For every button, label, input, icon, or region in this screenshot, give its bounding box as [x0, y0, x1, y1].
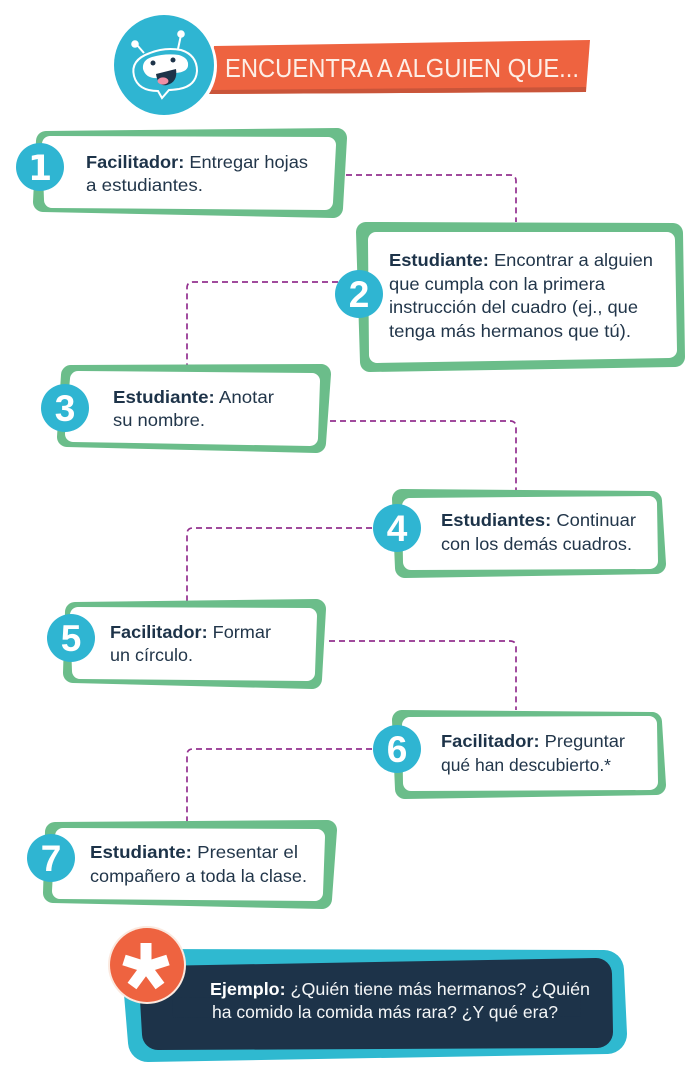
step 1 text: [86, 152, 308, 195]
step 7 text: Estudiante: Presentar el: [90, 842, 298, 862]
step 6 badge: 6: [387, 729, 407, 770]
icon: robot mascot: [111, 13, 217, 119]
step 6 badge: [373, 725, 421, 773]
step 4 text: con los demás cuadros.: [441, 534, 632, 554]
panel: step 7: [27, 830, 327, 899]
step 5 text: un círculo.: [110, 645, 193, 665]
step 2 badge: [335, 270, 383, 318]
step 7 badge: 7: [41, 838, 61, 879]
panel: step 3: [41, 374, 321, 443]
step 4 text: [441, 510, 636, 554]
step 1 badge: 1: [28, 149, 52, 189]
step 4 badge: [373, 504, 421, 552]
step 1 text: Facilitador: Entregar hojas: [86, 152, 308, 172]
title banner: [209, 40, 590, 94]
step 5 badge: [47, 614, 95, 662]
example text: ha comido la comida más rara? ¿Y qué era?: [212, 1002, 558, 1022]
example text: Ejemplo: ¿Quién tiene más hermanos? ¿Quién: [210, 979, 590, 999]
arrow: connector 2 to 3: [187, 282, 338, 365]
step 7 text: [90, 842, 307, 886]
step 3 badge: 3: [55, 388, 75, 429]
arrow: connector 5 to 6: [329, 641, 516, 710]
icon: asterisk badge: [108, 926, 186, 1004]
step 3 text: su nombre.: [113, 410, 205, 430]
step 4 text: Estudiantes: Continuar: [441, 510, 636, 530]
step 6 text: [441, 731, 625, 775]
step 7 badge: [27, 834, 75, 882]
step 5 text: [110, 622, 271, 665]
panel: step 1: [16, 138, 337, 208]
panel: step 4: [373, 499, 656, 568]
step 5 badge: 5: [61, 618, 81, 659]
step 1 badge: [16, 143, 64, 191]
step 3 badge: [41, 384, 89, 432]
step 2 text: que cumpla con la primera: [389, 274, 605, 294]
step 3 text: Estudiante: Anotar: [113, 387, 274, 407]
step 2 badge: 2: [349, 274, 369, 315]
title text: ENCUENTRA A ALGUIEN QUE...: [225, 53, 579, 83]
step 1 text: a estudiantes.: [86, 175, 203, 195]
panel: example callout: [108, 926, 607, 1042]
panel: step 5: [47, 609, 316, 679]
step 2 text: [389, 250, 653, 341]
step 2 text: Estudiante: Encontrar a alguien: [389, 250, 653, 270]
step 2 text: instrucción del cuadro (ej., que: [389, 297, 638, 317]
step 3 text: [113, 387, 274, 430]
panel: step 6: [373, 720, 656, 789]
step 7 text: compañero a toda la clase.: [90, 866, 307, 886]
arrow: connector 3 to 4: [330, 421, 516, 490]
arrow: connector 1 to 2: [346, 175, 516, 222]
step 4 badge: 4: [387, 508, 408, 549]
step 5 text: Facilitador: Formar: [110, 622, 271, 642]
panel: step 2: [335, 232, 675, 362]
arrow: connector 6 to 7: [187, 749, 372, 822]
step 6 text: Facilitador: Preguntar: [441, 731, 625, 751]
arrow: connector 4 to 5: [187, 528, 372, 602]
example text: [210, 979, 590, 1022]
step 6 text: qué han descubierto.*: [441, 755, 611, 775]
step 2 text: tenga más hermanos que tú).: [389, 321, 631, 341]
